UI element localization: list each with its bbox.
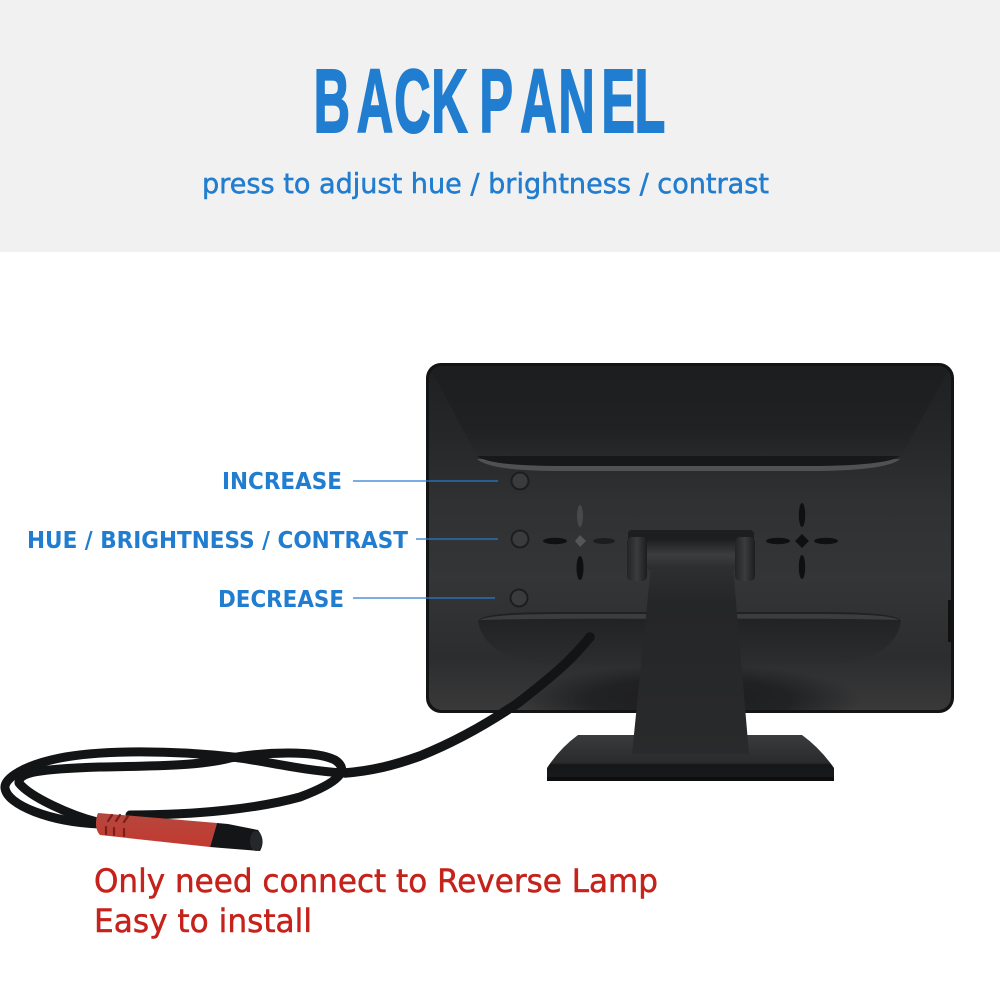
subtitle: press to adjust hue / brightness / contrast [202,167,769,200]
button: decrease [510,588,528,608]
button: increase [510,472,530,490]
header band [0,0,1000,252]
stand hinge [627,530,755,581]
red connector sleeve [96,813,217,847]
sleeve grooves [106,815,128,836]
monitor back panel [426,363,954,781]
title: BACK PANEL [314,52,665,152]
label: hue / brightness / contrast: HUE / BRIGHTNESS / CONTRAST [27,528,408,554]
connector tip [210,823,263,851]
cable loop [5,637,590,824]
red note: Only need connect to Reverse Lamp [94,862,658,900]
speaker holes left [543,505,615,580]
stand neck [632,566,749,754]
label: decrease: DECREASE [218,587,344,613]
monitor body [426,363,954,713]
red note [94,862,658,940]
stand base [547,735,834,781]
lower recess [478,612,901,664]
button: mode [510,530,530,548]
speaker holes right [766,503,838,579]
side port [948,600,951,642]
cable with connector [5,637,590,851]
red note: Easy to install [94,902,312,940]
label: increase: INCREASE [222,469,342,495]
upper ridge [477,459,900,471]
